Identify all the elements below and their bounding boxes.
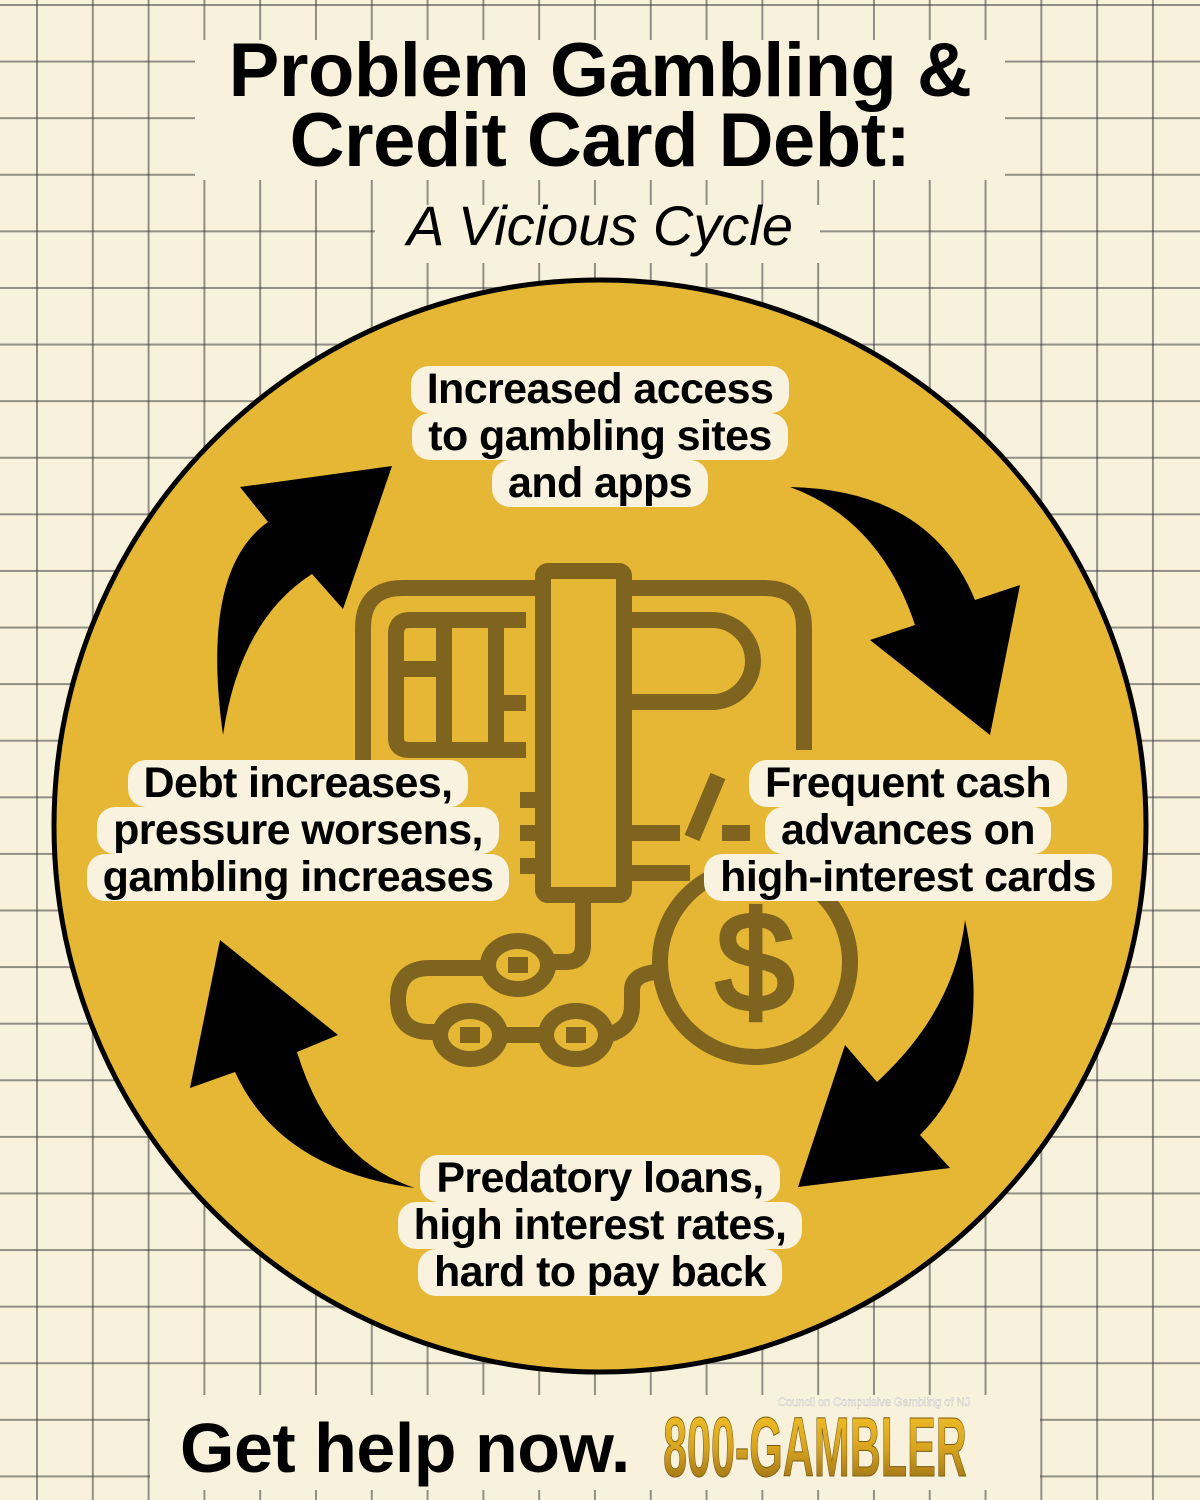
- footer call to action: Get help now.: [180, 1409, 630, 1487]
- text box: top: Increased access: [427, 365, 773, 413]
- text box: bottom: [398, 1154, 802, 1296]
- arrow: bottom-left: [190, 940, 415, 1188]
- text box: left: [87, 759, 509, 901]
- icon: dollar sign: $: [716, 883, 794, 1040]
- logo: 800-GAMBLER: Council on Compulsive Gambling of NJ: [778, 1395, 970, 1409]
- text box: right: advances on: [781, 806, 1035, 854]
- arrow: top-right: [790, 487, 1020, 735]
- text box: top: and apps: [508, 459, 692, 507]
- text box: left: Debt increases,: [144, 759, 452, 807]
- text box: right: [704, 759, 1112, 901]
- icon: credit card with chain and coin: [363, 571, 850, 1059]
- text box: top: [411, 365, 789, 507]
- title: [229, 28, 971, 183]
- text box: left: pressure worsens,: [113, 806, 483, 854]
- arrow: bottom-right: [798, 920, 974, 1187]
- text box: bottom: Predatory loans,: [436, 1154, 764, 1202]
- arrow: top-left: [217, 466, 392, 735]
- text box: left: gambling increases: [103, 853, 493, 901]
- text box: bottom: high interest rates,: [414, 1201, 786, 1249]
- title: Credit Card Debt:: [290, 98, 910, 183]
- text box: top: to gambling sites: [428, 412, 772, 460]
- yellow circle: [54, 280, 1146, 1372]
- text box: right: Frequent cash: [765, 759, 1051, 807]
- title: Problem Gambling &: [229, 28, 971, 113]
- text box: right: high-interest cards: [720, 853, 1096, 901]
- text box: bottom: hard to pay back: [434, 1248, 766, 1296]
- subtitle: A Vicious Cycle: [407, 194, 793, 257]
